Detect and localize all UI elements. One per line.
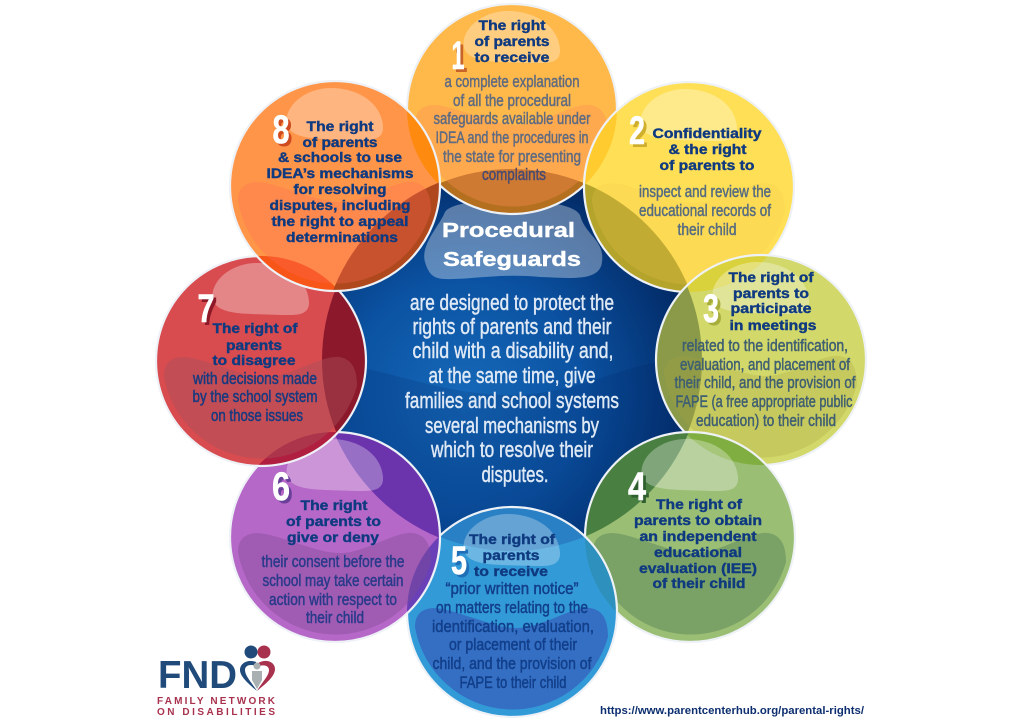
body text 6: their child (306, 608, 364, 627)
heading 8: disputes, including (270, 198, 410, 213)
body text 3: related to the identification, (682, 336, 848, 355)
body text 1: safeguards available under (434, 109, 591, 128)
number 2: 2 (632, 112, 648, 156)
body text 6: action with respect to (269, 590, 397, 609)
heading 4: of their child (652, 576, 746, 591)
heading 7: to disagree (212, 353, 296, 368)
heading 1 (474, 18, 550, 65)
number 3: 3 (706, 290, 722, 334)
body text 7: by the school system (192, 387, 318, 406)
heading 8: of parents (302, 135, 378, 150)
heading 2: Confidentiality (652, 126, 762, 141)
body text 7: with decisions made (192, 369, 317, 388)
circle 4 (584, 430, 796, 643)
body text 2 (639, 182, 771, 239)
source url: https://www.parentcenterhub.org/parental-rights/ (600, 705, 864, 717)
number 6: 6 (272, 465, 290, 509)
heading 2: of parents to (660, 158, 754, 173)
body text 5: “prior written notice” (446, 579, 579, 598)
central text block: several mechanisms by (425, 413, 599, 438)
body text 5: child, and the provision of (432, 654, 592, 673)
heading 1: to receive (474, 50, 550, 65)
central text block: child with a disability and, (412, 338, 614, 363)
panel: right 2, confidentiality (582, 81, 795, 293)
heading 8: & schools to use (278, 150, 403, 165)
title: Procedural Safeguards: Safeguards (443, 249, 581, 271)
heading 2: & the right (668, 142, 747, 157)
circle 6 (229, 431, 442, 643)
body text 7 (192, 369, 318, 425)
body text 2: their child (678, 220, 736, 239)
heading 6 (286, 498, 381, 545)
central text block: at the same time, give (428, 363, 596, 388)
body text 5: identification, evaluation, (432, 617, 594, 636)
number 5: 5 (454, 542, 470, 586)
body text 3: their child, and the provision of (674, 373, 856, 392)
heading 1: of parents (474, 34, 550, 49)
number 8: 8 (276, 111, 292, 155)
title: Procedural Safeguards: Procedural (442, 220, 575, 242)
heading 4 (634, 497, 762, 591)
heading 4: educational (654, 545, 742, 560)
body text 2: inspect and review the (639, 182, 771, 201)
title bubble: Procedural Safeguards (424, 200, 602, 279)
panel: right 4, independent evaluation (584, 430, 796, 643)
number 5: 5 (451, 539, 467, 583)
logo wordmark: FND (158, 654, 237, 697)
heading 3: The right of (728, 270, 814, 285)
logo caption (157, 696, 276, 718)
heading 4: evaluation (IEE) (639, 561, 757, 576)
panel: right 7, disagree with decisions (155, 255, 368, 468)
body text 1: IDEA and the procedures in (436, 128, 588, 147)
heading 8: determinations (286, 230, 398, 245)
body text 3 (674, 336, 856, 430)
number 4: 4 (628, 465, 647, 509)
heading 3: participate (730, 301, 812, 316)
heading 6: give or deny (287, 530, 380, 545)
body text 5: on matters relating to the (436, 598, 588, 617)
number 8: 8 (272, 108, 290, 152)
heading 8: the right to appeal (272, 214, 408, 229)
body text 5: or placement of their (449, 635, 577, 654)
body text 5 (432, 579, 594, 692)
panel: right 8, resolving disputes (229, 80, 442, 292)
central panel: blue star background (340, 188, 682, 534)
central text block: families and school systems (405, 388, 619, 413)
heading 3: in meetings (730, 318, 816, 333)
circle 7 (155, 255, 368, 468)
heading 4: The right of (656, 497, 743, 512)
central text block (405, 290, 619, 487)
circle 8 (229, 80, 442, 292)
icon: family heart (240, 646, 275, 691)
logo caption: FAMILY NETWORK (157, 696, 276, 707)
panel: right 6, give or deny consent (229, 431, 442, 643)
logo caption: ON DISABILITIES (157, 707, 275, 718)
central text block: disputes. (482, 462, 548, 487)
number 1: 1 (454, 37, 468, 81)
logo: Family Network on Disabilities (157, 646, 276, 718)
body text 3: education) to their child (696, 411, 836, 430)
body text 3: evaluation, and placement of (680, 355, 850, 374)
number 6: 6 (275, 468, 293, 512)
heading 3: parents to (733, 286, 809, 301)
body text 7: on those issues (211, 406, 303, 425)
number 1: 1 (452, 34, 464, 78)
heading 6: of parents to (286, 514, 381, 529)
central text block: rights of parents and their (412, 314, 612, 339)
panel: right 3, participate in meetings (654, 254, 867, 466)
heading 3 (728, 270, 816, 333)
heading 4: an independent (640, 529, 757, 544)
body text 1: the state for presenting (443, 147, 581, 166)
heading 7: The right of (212, 321, 298, 336)
body text 5: FAPE to their child (460, 673, 566, 692)
body text 2: educational records of (639, 201, 771, 220)
heading 1: The right (478, 18, 546, 33)
central text block: are designed to protect the (410, 290, 614, 315)
heading 6: The right (300, 498, 368, 513)
heading 5: parents (482, 548, 540, 563)
number 4: 4 (631, 468, 650, 512)
heading 8: IDEA’s mechanisms (266, 166, 414, 181)
body text 1: complaints (482, 165, 546, 184)
number 7: 7 (198, 287, 214, 331)
body text 1: of all the procedural (453, 91, 571, 110)
circle 2 (582, 81, 795, 293)
heading 5: to receive (474, 564, 549, 579)
number 1 (452, 34, 468, 81)
circle 5 (406, 506, 618, 718)
body text 6: their consent before the (262, 552, 404, 571)
panel: right 1, complete explanation (406, 3, 618, 216)
circle 3 (654, 254, 867, 466)
number 2: 2 (629, 109, 645, 153)
heading 4: parents to obtain (634, 513, 762, 528)
body text 3: FAPE (a free appropriate public (676, 392, 853, 411)
body text 1 (434, 72, 591, 184)
body text 6 (262, 552, 404, 627)
title: Procedural Safeguards (442, 220, 581, 271)
heading 5 (469, 532, 556, 579)
number 3: 3 (703, 287, 719, 331)
number 7: 7 (200, 290, 218, 334)
heading 2 (652, 126, 762, 173)
body text 1: a complete explanation (444, 72, 580, 91)
heading 7: parents (226, 338, 282, 353)
body text 6: school may take certain (262, 571, 404, 590)
heading 5: The right of (469, 532, 556, 547)
central text block: which to resolve their (430, 437, 593, 462)
heading 8 (266, 119, 414, 245)
heading 8: for resolving (294, 182, 386, 197)
panel: right 5, prior written notice (406, 506, 618, 718)
heading 7 (212, 321, 298, 368)
circle 1 (406, 3, 618, 216)
heading 8: The right (306, 119, 374, 134)
